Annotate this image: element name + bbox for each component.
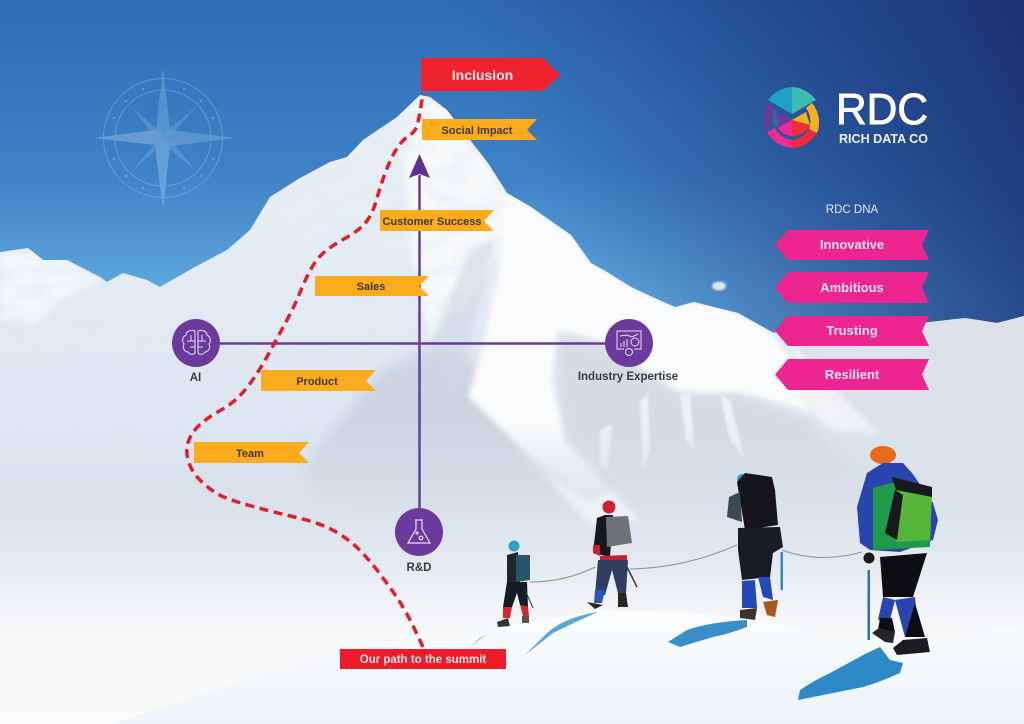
node: Industry Expertise: Industry Expertise xyxy=(578,371,678,383)
background: snow ridge foreground xyxy=(113,610,1024,724)
ribbon: Trusting: Trusting xyxy=(826,323,878,338)
banner: Social Impact: Social Impact xyxy=(442,125,513,137)
banner: Customer Success xyxy=(380,210,494,231)
climber 1 xyxy=(497,540,533,627)
ribbon: Ambitious xyxy=(775,272,929,303)
icon: dashboard chart xyxy=(617,331,641,356)
banner: Sales xyxy=(315,276,429,296)
node: Industry Expertise xyxy=(578,319,678,383)
banner: Product xyxy=(261,370,376,391)
icon: flask xyxy=(408,520,430,543)
banner: Product: Product xyxy=(296,376,338,388)
banner: Customer Success: Customer Success xyxy=(382,216,482,228)
logo wordmark: RDC xyxy=(836,85,928,134)
path: dashed route to the summit xyxy=(187,93,423,647)
banner: Team: Team xyxy=(236,448,264,460)
banner: Sales: Sales xyxy=(357,281,385,293)
node: AI: AI xyxy=(190,372,201,384)
climber 3 xyxy=(727,473,783,620)
climber 2 xyxy=(587,500,637,609)
node: AI xyxy=(172,319,220,384)
illustration: climbers on rope xyxy=(466,446,938,700)
chart: vertical axis with arrow xyxy=(409,154,430,510)
banner: Team xyxy=(194,442,309,463)
chart: horizontal axis xyxy=(218,342,606,345)
logo tagline: RICH DATA CO xyxy=(839,132,928,146)
ribbon: Innovative xyxy=(775,230,929,260)
icon: brain xyxy=(183,330,210,354)
logo mark xyxy=(764,87,819,148)
node: R&D: R&D xyxy=(407,562,431,574)
label: Our path to the summit xyxy=(340,649,506,669)
heading: RDC DNA: RDC DNA xyxy=(826,204,879,216)
banner: Social Impact xyxy=(422,119,537,140)
label: Our path to the summit: Our path to the summit xyxy=(360,654,486,666)
rope xyxy=(530,545,862,582)
ribbon: Resilient xyxy=(775,359,929,390)
ribbon: Ambitious: Ambitious xyxy=(820,280,884,295)
icon: compass rose xyxy=(93,68,235,210)
ribbon: Innovative: Innovative xyxy=(820,237,884,252)
shadows on snow xyxy=(466,612,903,700)
logo: RDC Rich Data Co xyxy=(764,85,928,148)
flag: Inclusion xyxy=(421,58,560,91)
ribbon: Resilient: Resilient xyxy=(825,367,880,382)
climber 4 xyxy=(857,446,938,655)
background: sky xyxy=(0,0,1024,345)
node: R&D xyxy=(395,508,443,574)
flag: Inclusion: Inclusion xyxy=(452,67,513,83)
background: mountain range xyxy=(0,95,1024,640)
ribbon: Trusting xyxy=(775,316,929,346)
